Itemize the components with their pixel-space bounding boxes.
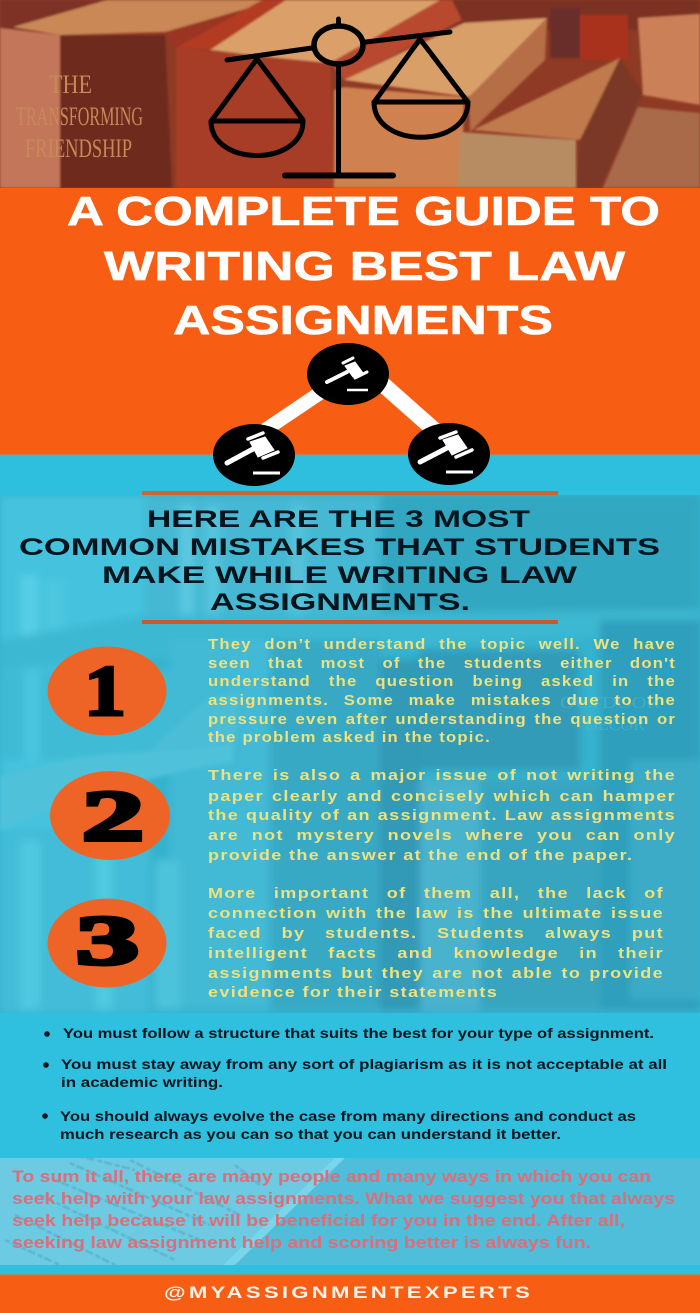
conclusion text: seeking law assignment help and scoring better is always fun. — [12, 1234, 591, 1252]
bookshelf photo panel: DECOR — [585, 715, 646, 734]
orange title band — [0, 188, 700, 455]
conclusion photo panel — [0, 1156, 700, 1265]
icon: gavel top — [307, 343, 389, 405]
title: ASSIGNMENTS — [173, 297, 553, 343]
subheading: MAKE WHILE WRITING LAW — [102, 562, 577, 589]
paragraph 1: pressure even after understanding the question or — [208, 712, 676, 728]
conclusion text: To sum it all, there are many people and many ways in which you can — [12, 1168, 651, 1186]
number badge 1: 1 — [84, 651, 126, 731]
title: WRITING BEST LAW — [104, 243, 625, 289]
paragraph 3: More important of them all, the lack of — [208, 885, 664, 902]
tip 2: in academic writing. — [61, 1074, 223, 1090]
tips list — [42, 1025, 667, 1142]
tip 3 — [42, 1108, 636, 1142]
paragraph 1 — [208, 637, 676, 746]
subheading — [19, 506, 660, 616]
divider: top — [142, 491, 558, 495]
tip 1: You must follow a structure that suits the best for your type of assignment. — [63, 1025, 654, 1041]
header photo: books: FRIENDSHIP — [25, 134, 132, 163]
icon: scales of justice — [211, 19, 468, 176]
header photo: books — [0, 0, 700, 188]
number badge 2: 2 — [82, 776, 144, 856]
paragraph 3: intelligent facts and knowledge in their — [208, 945, 664, 962]
conclusion text — [12, 1168, 675, 1252]
title — [67, 188, 660, 343]
paragraph 2: provide the answer at the end of the paper. — [208, 847, 633, 864]
divider: bottom — [142, 620, 558, 624]
subheading: COMMON MISTAKES THAT STUDENTS — [19, 534, 660, 561]
number badge 3 — [48, 898, 166, 988]
paragraph 1: understand the question being asked in the — [208, 674, 676, 690]
title: A COMPLETE GUIDE TO — [67, 188, 660, 234]
paragraph 2 — [208, 767, 676, 864]
paragraph 3: evidence for their statements — [208, 984, 498, 1001]
tip 2 — [43, 1056, 667, 1090]
paragraph 3: assignments but they are not able to provide — [208, 965, 664, 982]
paragraph 3: connection with the law is the ultimate issue — [208, 905, 664, 922]
tip 3: You should always evolve the case from many directions and conduct as — [60, 1108, 636, 1124]
conclusion text: seek help because it will be beneficial for you in the end. After all, — [12, 1212, 625, 1230]
teal band — [0, 455, 700, 491]
paragraph 2: There is also a major issue of not writing the — [208, 767, 676, 784]
paragraph 3 — [208, 885, 664, 1001]
footer handle: @MYASSIGNMENTEXPERTS — [164, 1283, 533, 1302]
subheading: HERE ARE THE 3 MOST — [147, 506, 530, 533]
paragraph 2: are not mystery novels where you can only — [208, 827, 676, 844]
icon: gavel right — [408, 423, 490, 485]
icon: gavel left — [213, 424, 295, 486]
header photo: books: THE — [49, 70, 92, 99]
tips band — [0, 1013, 700, 1275]
bookshelf photo panel: OUTDOOR — [560, 693, 661, 712]
paragraph 1: the problem asked in the topic. — [208, 730, 491, 746]
paragraph 1: assignments. Some make mistakes due to the — [208, 692, 676, 708]
subheading: ASSIGNMENTS. — [210, 589, 470, 616]
paragraph 3: faced by students. Students always put — [208, 925, 664, 942]
gavel network — [213, 343, 490, 486]
paragraph 1: They don’t understand the topic well. We have — [208, 637, 676, 653]
paragraph 2: paper clearly and concisely which can hamper — [208, 788, 676, 804]
header photo: books: TRANSFORMING — [16, 102, 143, 131]
number badge 1 — [48, 646, 166, 736]
paragraph 2: the quality of an assignment. Law assignments — [208, 807, 676, 824]
number badge 2 — [50, 771, 170, 860]
number badge 3: 3 — [76, 903, 139, 980]
tip 3: much research as you can so that you can understand it better. — [60, 1126, 561, 1142]
paragraph 1: seen that most of the students either don't — [208, 656, 676, 672]
conclusion text: seek help with your law assignments. What we suggest you that always — [12, 1190, 675, 1208]
footer band — [0, 1275, 700, 1313]
tip 2: You must stay away from any sort of plagiarism as it is not acceptable at all — [61, 1056, 667, 1072]
bookshelf photo panel — [0, 495, 700, 1013]
